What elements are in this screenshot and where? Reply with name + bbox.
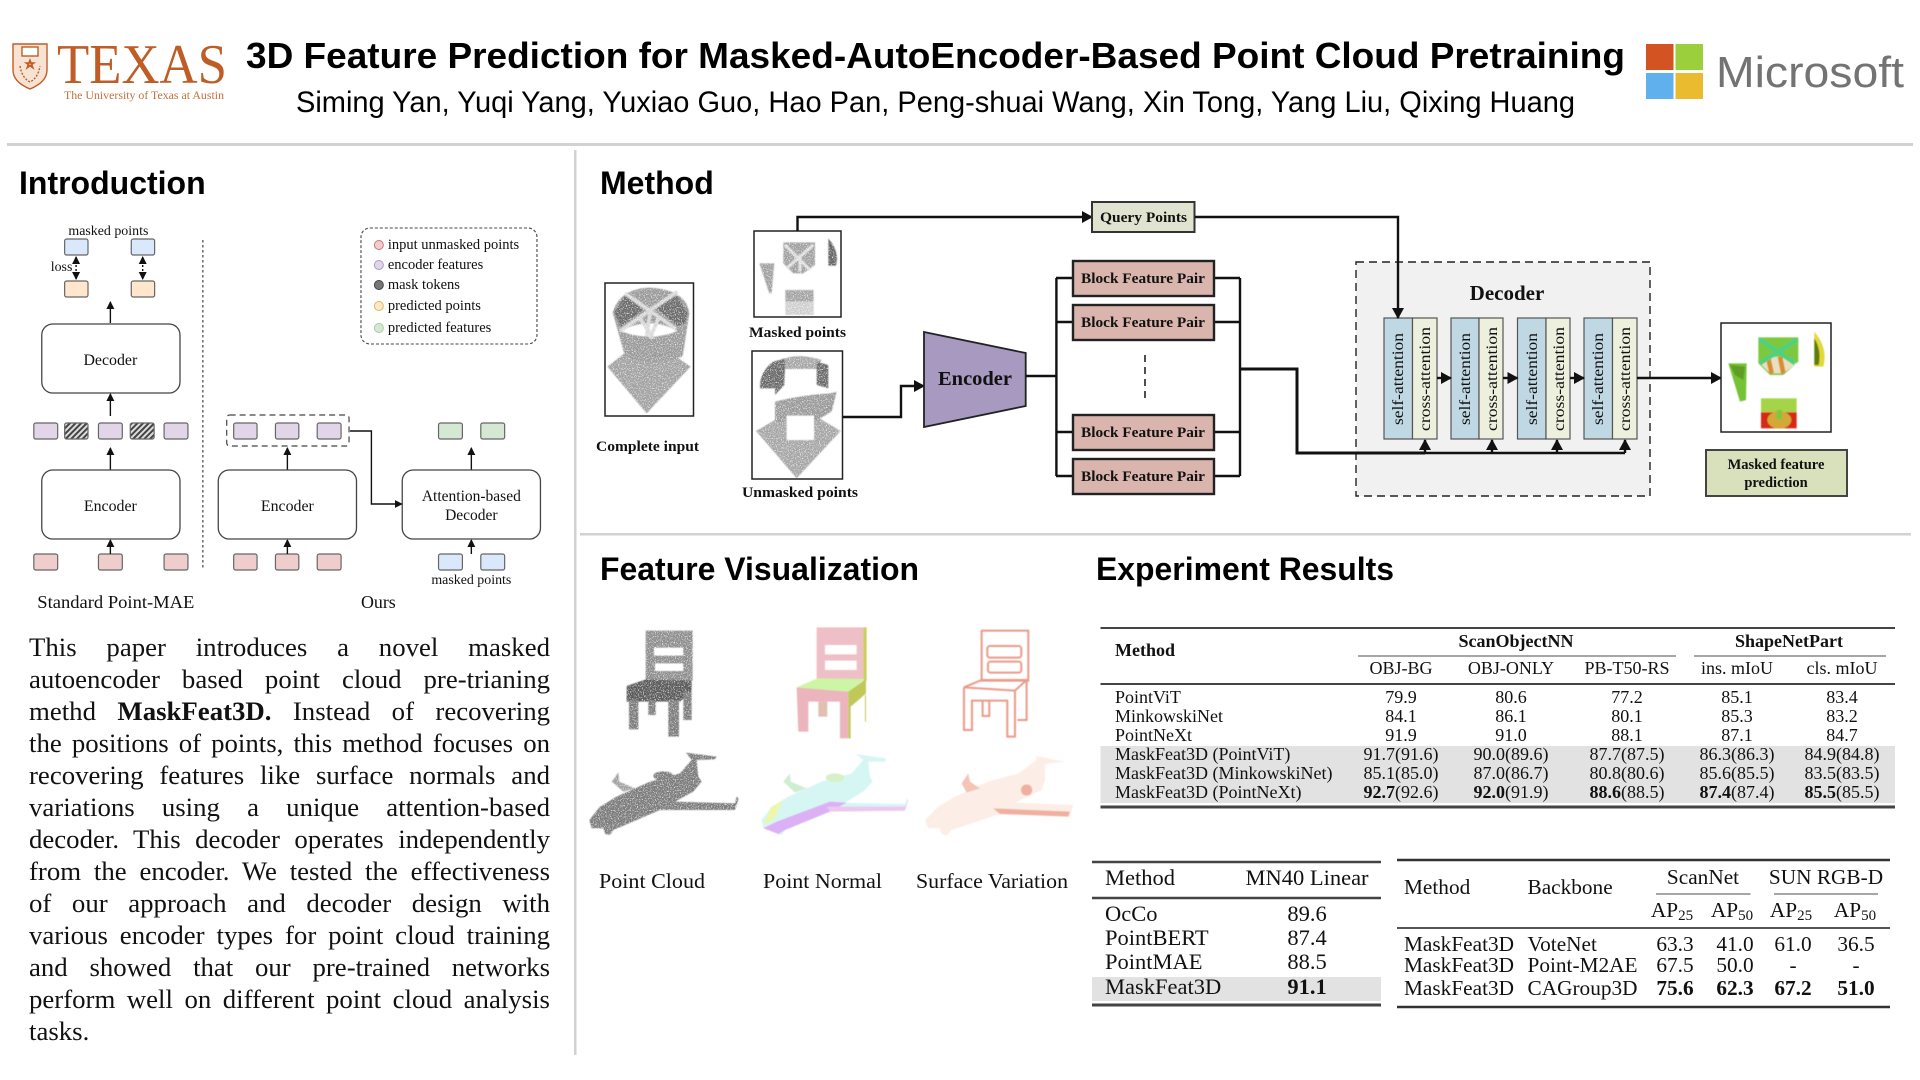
table: ScanNet and SUN RGB-D: - xyxy=(1789,953,1797,977)
table: ScanNet and SUN RGB-D: - xyxy=(1852,953,1860,977)
table: ScanObjectNN and ShapeNetPart results: MaskFeat3D (PointNeXt) xyxy=(1115,782,1301,803)
label: complete input: Complete input xyxy=(596,439,699,455)
label: masked points: Masked points xyxy=(749,325,846,341)
table: ScanObjectNN and ShapeNetPart results: 84.9(84.8) xyxy=(1804,744,1880,765)
diagram: Standard Point-MAE: Encoder xyxy=(84,498,138,515)
table: ScanObjectNN and ShapeNetPart results: 92.7(92.6) xyxy=(1364,782,1438,803)
text block: introduction paragraph: tasks. xyxy=(29,1016,89,1046)
labels: visualization captions: Point Cloud xyxy=(599,869,705,893)
table: MN40 linear: PointMAE xyxy=(1105,949,1203,974)
table: ScanObjectNN and ShapeNetPart results: MaskFeat3D (PointViT) xyxy=(1115,744,1290,765)
arrow: feature pairs to decoder xyxy=(1240,369,1625,453)
table: ScanNet and SUN RGB-D: 25 xyxy=(1678,908,1693,924)
table: MN40 linear xyxy=(1092,862,1381,1005)
table: ScanObjectNN and ShapeNetPart results: ShapeNetPart xyxy=(1735,631,1843,651)
table: MN40 linear: MN40 Linear xyxy=(1245,865,1369,890)
table: ScanNet and SUN RGB-D: 50.0 xyxy=(1716,953,1754,977)
diagram: Ours: Ours xyxy=(361,592,396,612)
table: ScanObjectNN and ShapeNetPart results: 91.0 xyxy=(1495,725,1527,745)
panel: decoder: Decoder xyxy=(1470,281,1544,305)
table: MN40 linear: MaskFeat3D xyxy=(1105,974,1221,999)
table: ScanNet and SUN RGB-D: MaskFeat3D xyxy=(1404,932,1514,956)
box: query points xyxy=(1092,202,1194,232)
table: ScanObjectNN and ShapeNetPart results: 85.1 xyxy=(1721,687,1753,707)
legend: encoder features xyxy=(388,257,484,273)
image: complete input xyxy=(605,283,694,416)
table: ScanObjectNN and ShapeNetPart results: 87.1 xyxy=(1721,725,1753,745)
table: ScanNet and SUN RGB-D: AP xyxy=(1711,898,1738,922)
labels: visualization captions: Point Normal xyxy=(763,869,882,893)
table: ScanObjectNN and ShapeNetPart results: PointViT xyxy=(1115,687,1181,707)
table: MN40 linear: 89.6 xyxy=(1287,901,1327,926)
diagram: Standard Point-MAE: Standard Point-MAE xyxy=(37,592,194,612)
diagram: Ours xyxy=(218,415,540,612)
image: surface variation chair and plane xyxy=(925,631,1073,836)
header: UT Austin logo: The University of Texas at Austin xyxy=(64,90,224,102)
diagram: Ours: masked points xyxy=(431,573,511,588)
header: UT Austin logo: TEXAS xyxy=(57,34,227,96)
table: ScanNet and SUN RGB-D: 75.6 xyxy=(1656,976,1694,1000)
heading: Feature Visualization: Feature Visualization xyxy=(600,551,919,587)
box: encoder xyxy=(924,332,1026,427)
table: ScanNet and SUN RGB-D: 63.3 xyxy=(1656,932,1694,956)
header: Microsoft logo xyxy=(1646,44,1904,99)
table: ScanObjectNN and ShapeNetPart results: 91.9 xyxy=(1385,725,1417,745)
panel: decoder: cross-attention xyxy=(1617,327,1634,431)
table: ScanNet and SUN RGB-D: 62.3 xyxy=(1716,976,1754,1000)
table: ScanObjectNN and ShapeNetPart results: ScanObjectNN xyxy=(1458,631,1574,651)
box: query points: Query Points xyxy=(1100,210,1187,226)
label: unmasked points: Unmasked points xyxy=(742,485,858,501)
box: block feature pairs: Block Feature Pair xyxy=(1081,425,1206,441)
table: ScanNet and SUN RGB-D: AP xyxy=(1651,898,1678,922)
panel: decoder xyxy=(1356,262,1650,496)
text block: introduction paragraph: recovering features like surface normals and xyxy=(29,760,550,790)
table: ScanObjectNN and ShapeNetPart results: ins. mIoU xyxy=(1701,658,1773,678)
text block: introduction paragraph: This paper introduces a novel masked xyxy=(29,632,550,662)
text block: introduction paragraph: perform well on different point cloud analysis xyxy=(29,984,550,1014)
panel: decoder: cross-attention xyxy=(1484,327,1501,431)
box: encoder: Encoder xyxy=(938,368,1012,390)
table: ScanNet and SUN RGB-D: MaskFeat3D xyxy=(1404,953,1514,977)
table: ScanObjectNN and ShapeNetPart results: 85.5(85.5) xyxy=(1804,782,1880,803)
table: ScanNet and SUN RGB-D: Method xyxy=(1404,875,1471,899)
table: ScanObjectNN and ShapeNetPart results: Method xyxy=(1115,640,1175,660)
table: ScanNet and SUN RGB-D: Point-M2AE xyxy=(1528,953,1638,977)
table: ScanObjectNN and ShapeNetPart results: 86.1 xyxy=(1495,706,1527,726)
header: UT Austin logo xyxy=(13,34,227,102)
table: ScanObjectNN and ShapeNetPart results: 91.7(91.6) xyxy=(1364,744,1438,765)
table: ScanObjectNN and ShapeNetPart results: 80.1 xyxy=(1611,706,1643,726)
table: ScanObjectNN and ShapeNetPart results: 85.3 xyxy=(1721,706,1753,726)
table: MN40 linear: Method xyxy=(1105,865,1175,890)
table: ScanNet and SUN RGB-D: 51.0 xyxy=(1837,976,1875,1000)
table: ScanObjectNN and ShapeNetPart results: PointNeXt xyxy=(1115,725,1192,745)
table: ScanNet and SUN RGB-D: MaskFeat3D xyxy=(1404,976,1514,1000)
table: ScanNet and SUN RGB-D: 25 xyxy=(1797,908,1812,924)
chart: Point-MAE vs Ours diagram xyxy=(34,224,540,612)
label: masked feature prediction xyxy=(1706,450,1847,496)
table: ScanObjectNN and ShapeNetPart results: 90.0(89.6) xyxy=(1474,744,1548,765)
panel: decoder: self-attention xyxy=(1390,333,1407,425)
labels: visualization captions xyxy=(599,869,1068,893)
heading: Introduction: Introduction xyxy=(19,165,206,201)
arrow: query points to decoder xyxy=(1195,217,1398,318)
table: ScanObjectNN and ShapeNetPart results: MinkowskiNet xyxy=(1115,706,1223,726)
heading: Method: Method xyxy=(600,165,714,201)
text block: introduction paragraph: autoencoder based point cloud pre-trianing xyxy=(29,664,550,694)
text block: introduction paragraph xyxy=(29,632,550,1046)
panel: decoder: self-attention xyxy=(1457,333,1474,425)
table: ScanObjectNN and ShapeNetPart results: 84.7 xyxy=(1826,725,1858,745)
table: ScanObjectNN and ShapeNetPart results: cls. mIoU xyxy=(1806,658,1878,678)
table: ScanNet and SUN RGB-D: ScanNet xyxy=(1667,865,1739,889)
table: ScanNet and SUN RGB-D: AP xyxy=(1770,898,1797,922)
table: ScanObjectNN and ShapeNetPart results: 88.1 xyxy=(1611,725,1643,745)
table: ScanObjectNN and ShapeNetPart results: 87.4(87.4) xyxy=(1700,782,1774,803)
label: masked feature prediction: Masked feature xyxy=(1728,457,1825,473)
table: ScanObjectNN and ShapeNetPart results: OBJ-ONLY xyxy=(1468,658,1554,678)
panel: decoder: self-attention xyxy=(1590,333,1607,425)
table: ScanObjectNN and ShapeNetPart results: 83.2 xyxy=(1826,706,1858,726)
text block: introduction paragraph: and showed that our pre-trained networks xyxy=(29,952,550,982)
diagram: Ours: Decoder xyxy=(445,507,498,524)
legend: predicted features xyxy=(388,320,492,336)
table: ScanObjectNN and ShapeNetPart results: 87.0(86.7) xyxy=(1474,763,1548,784)
table: ScanNet and SUN RGB-D: 67.5 xyxy=(1656,953,1694,977)
diagram: Standard Point-MAE: loss xyxy=(51,260,72,275)
box: block feature pairs: Block Feature Pair xyxy=(1081,469,1206,485)
table: ScanObjectNN and ShapeNetPart results: 88.6(88.5) xyxy=(1590,782,1664,803)
connector: encoder to feature pairs xyxy=(1026,278,1240,476)
text block: introduction paragraph: of our approach and decoder design with xyxy=(29,888,550,918)
arrow: unmasked points to encoder xyxy=(843,386,924,417)
diagram: Standard Point-MAE xyxy=(34,224,194,612)
table: ScanObjectNN and ShapeNetPart results: 83.4 xyxy=(1826,687,1858,707)
table: ScanObjectNN and ShapeNetPart results: 80.6 xyxy=(1495,687,1527,707)
table: ScanNet and SUN RGB-D: Backbone xyxy=(1528,875,1613,899)
table: ScanObjectNN and ShapeNetPart results: 84.1 xyxy=(1385,706,1417,726)
table: MN40 linear: PointBERT xyxy=(1105,925,1209,950)
table: MN40 linear: 87.4 xyxy=(1287,925,1327,950)
title: 3D Feature Prediction for Masked-AutoEncoder-Based Point Cloud Pretraining xyxy=(246,35,1625,76)
panel: decoder: cross-attention xyxy=(1417,327,1434,431)
icon: Texas shield xyxy=(13,44,47,89)
legend: mask tokens xyxy=(388,277,460,293)
image: point cloud chair and plane xyxy=(589,631,739,835)
text block: introduction paragraph: the positions of points, this method focuses on xyxy=(29,728,550,758)
arrow: masked points to query points xyxy=(798,217,1092,231)
box: block feature pairs: Block Feature Pair xyxy=(1081,315,1206,331)
table: MN40 linear: 91.1 xyxy=(1287,974,1327,999)
table: ScanObjectNN and ShapeNetPart results: 92.0(91.9) xyxy=(1474,782,1548,803)
table: ScanObjectNN and ShapeNetPart results: OBJ-BG xyxy=(1369,658,1433,678)
image: masked points xyxy=(754,231,841,317)
table: ScanNet and SUN RGB-D: SUN RGB-D xyxy=(1769,865,1883,889)
table: ScanNet and SUN RGB-D: 36.5 xyxy=(1837,932,1875,956)
authors: Siming Yan, Yuqi Yang, Yuxiao Guo, Hao Pan, Peng-shuai Wang, Xin Tong, Yang Liu, Qixing Huang xyxy=(296,86,1575,119)
table: ScanNet and SUN RGB-D: 50 xyxy=(1738,908,1753,924)
legend: input unmasked points xyxy=(388,237,520,253)
table: ScanObjectNN and ShapeNetPart results: 79.9 xyxy=(1385,687,1417,707)
text block: introduction paragraph: from the encoder. We tested the effectiveness xyxy=(29,856,550,886)
table: ScanObjectNN and ShapeNetPart results: MaskFeat3D (MinkowskiNet) xyxy=(1115,763,1332,784)
diagram: Ours: Attention-based xyxy=(422,488,521,505)
heading: Experiment Results: Experiment Results xyxy=(1096,551,1394,587)
table: ScanObjectNN and ShapeNetPart results: 83.5(83.5) xyxy=(1804,763,1880,784)
image: masked feature output xyxy=(1721,323,1831,432)
table: ScanObjectNN and ShapeNetPart results: 85.6(85.5) xyxy=(1700,763,1774,784)
header: Microsoft logo: Microsoft xyxy=(1716,48,1904,97)
table: ScanObjectNN and ShapeNetPart results: 80.8(80.6) xyxy=(1590,763,1664,784)
label: masked feature prediction: prediction xyxy=(1744,475,1808,491)
table: ScanObjectNN and ShapeNetPart results: 86.3(86.3) xyxy=(1700,744,1774,765)
legend: predicted points xyxy=(388,298,481,314)
panel: decoder: cross-attention xyxy=(1551,327,1568,431)
text block: introduction paragraph: various encoder types for point cloud training xyxy=(29,920,550,950)
table: ScanNet and SUN RGB-D: CAGroup3D xyxy=(1528,976,1638,1000)
diagram: Ours: Encoder xyxy=(261,498,315,515)
panel: feature visualization xyxy=(589,627,1073,893)
box: block feature pairs: Block Feature Pair xyxy=(1081,271,1206,287)
table: ScanObjectNN and ShapeNetPart results: 77.2 xyxy=(1611,687,1643,707)
table: ScanNet and SUN RGB-D: 50 xyxy=(1861,908,1876,924)
labels: visualization captions: Surface Variation xyxy=(916,869,1068,893)
table: ScanObjectNN and ShapeNetPart results: 87.7(87.5) xyxy=(1590,744,1664,765)
table: ScanNet and SUN RGB-D: VoteNet xyxy=(1528,932,1597,956)
arrow: decoder to output xyxy=(1637,377,1721,379)
table: ScanObjectNN and ShapeNetPart results: PB-T50-RS xyxy=(1584,658,1670,678)
table: ScanNet and SUN RGB-D: 61.0 xyxy=(1774,932,1812,956)
table: ScanNet and SUN RGB-D: AP xyxy=(1834,898,1861,922)
chart: method pipeline xyxy=(596,202,1847,501)
legend xyxy=(361,228,537,344)
panel: decoder: self-attention xyxy=(1524,333,1541,425)
image: point normal chair and plane xyxy=(762,627,908,835)
table: MN40 linear: 88.5 xyxy=(1287,949,1327,974)
table: ScanObjectNN and ShapeNetPart results xyxy=(1100,628,1895,807)
table: ScanNet and SUN RGB-D: 41.0 xyxy=(1716,932,1754,956)
text block: introduction paragraph: decoder. This decoder operates independently xyxy=(29,824,550,854)
table: ScanObjectNN and ShapeNetPart results: 85.1(85.0) xyxy=(1364,763,1438,784)
table: ScanNet and SUN RGB-D: 67.2 xyxy=(1774,976,1812,1000)
text block: introduction paragraph: methd MaskFeat3D. Instead of recovering xyxy=(29,696,550,726)
diagram: Standard Point-MAE: Decoder xyxy=(83,352,138,369)
box: block feature pairs xyxy=(1073,261,1214,494)
table: ScanNet and SUN RGB-D xyxy=(1397,860,1890,1007)
diagram: Standard Point-MAE: masked points xyxy=(68,224,148,239)
table: MN40 linear: OcCo xyxy=(1105,901,1158,926)
image: unmasked points xyxy=(752,351,842,479)
text block: introduction paragraph: variations using a unique attention-based xyxy=(29,792,550,822)
